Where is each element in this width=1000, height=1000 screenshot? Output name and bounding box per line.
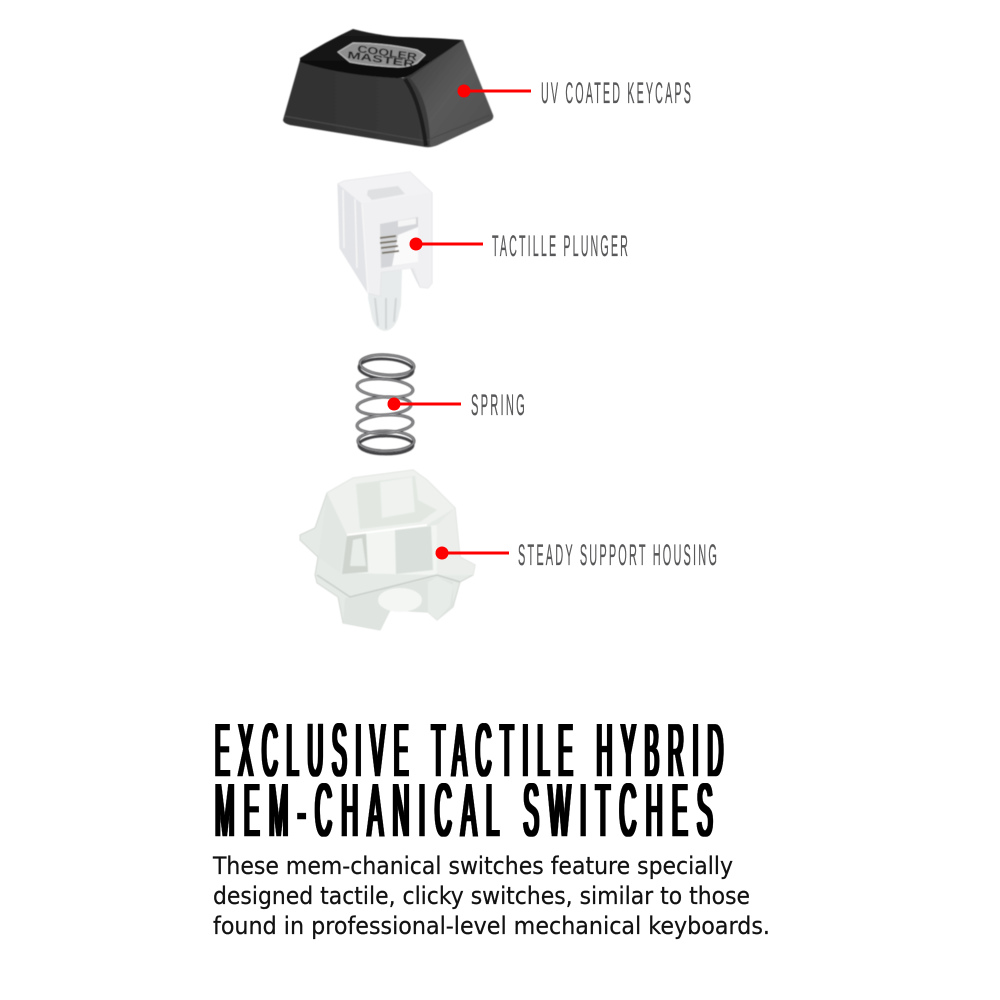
icon: metal spring <box>356 353 415 454</box>
text: UV COATED KEYCAPS <box>541 77 693 110</box>
small spring in plunger <box>380 236 399 253</box>
icon: clear housing <box>300 470 475 630</box>
description text: designed tactile, clicky switches, similar to those <box>213 882 750 910</box>
description text <box>212 852 770 940</box>
callout: UV coated keycaps <box>458 77 693 110</box>
logo badge: MASTER <box>347 50 417 71</box>
callout: tactille plunger <box>410 230 630 263</box>
icon: black keycap <box>283 29 493 147</box>
logo badge <box>338 43 425 71</box>
logo badge: COOLER <box>357 44 419 63</box>
heading <box>215 708 732 852</box>
text: TACTILLE PLUNGER <box>492 230 630 263</box>
callout: steady support housing <box>436 539 719 572</box>
text: SPRING <box>471 389 527 422</box>
callout: spring <box>388 389 527 422</box>
description text: found in professional-level mechanical keyboards. <box>213 912 770 940</box>
description text: These mem-chanical switches feature specially <box>212 852 733 880</box>
icon: white plunger <box>338 172 432 331</box>
